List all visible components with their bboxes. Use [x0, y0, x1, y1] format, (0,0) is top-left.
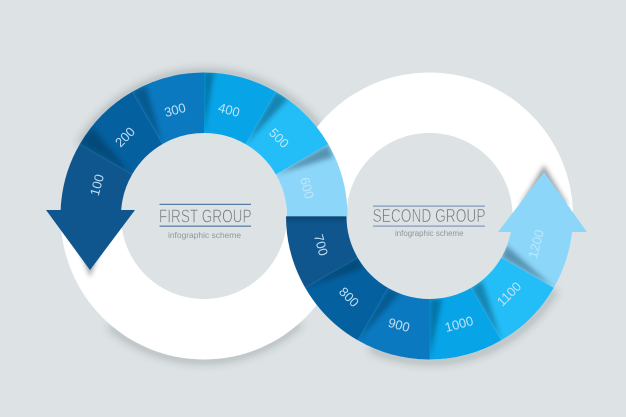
segment 700: [286, 216, 358, 288]
segment 600: [276, 144, 348, 216]
first group label: FIRST GROUP: [159, 206, 252, 227]
segment numbers: 1000: [443, 313, 475, 335]
infographic canvas: [46, 64, 587, 369]
segment 1200 with up arrow: [498, 172, 587, 288]
arrow drop shadows: [76, 165, 568, 277]
segment numbers: 700: [311, 233, 331, 257]
segment 300: [132, 72, 204, 144]
segment 500: [246, 92, 328, 174]
first group arc: [46, 72, 348, 270]
white ring: right circle: [286, 72, 573, 360]
inner disc: left: [121, 133, 287, 299]
segment 100 with down arrow: [46, 144, 135, 270]
second group label: SECOND GROUP: [372, 205, 486, 226]
segment numbers: [87, 100, 547, 335]
segment numbers: 900: [387, 315, 411, 335]
segment 1100: [471, 258, 554, 340]
ring shadows: [80, 72, 555, 362]
segment numbers: 200: [112, 124, 138, 150]
segment 1000: [430, 288, 501, 360]
segment numbers: 300: [163, 100, 187, 120]
first group label: [159, 204, 252, 240]
second group label: [372, 205, 486, 238]
segment numbers: 800: [336, 284, 362, 310]
segment numbers: 1200: [525, 228, 547, 260]
segment 200: [80, 92, 162, 174]
segment numbers: 100: [87, 173, 107, 197]
segment 800: [305, 258, 388, 340]
segment numbers: 1100: [494, 279, 524, 309]
second group label: infographic scheme: [395, 229, 464, 238]
segment 400: [204, 72, 276, 144]
first group label: infographic scheme: [168, 231, 242, 240]
segment 900: [358, 288, 430, 360]
segment numbers: 600: [297, 176, 317, 200]
white ring: left circle: [60, 72, 348, 360]
fold shadows between segments: [78, 72, 554, 360]
segment numbers: 500: [266, 125, 292, 151]
second group arc: [286, 172, 587, 360]
segment numbers: 400: [217, 100, 241, 120]
inner disc: right: [346, 133, 512, 299]
